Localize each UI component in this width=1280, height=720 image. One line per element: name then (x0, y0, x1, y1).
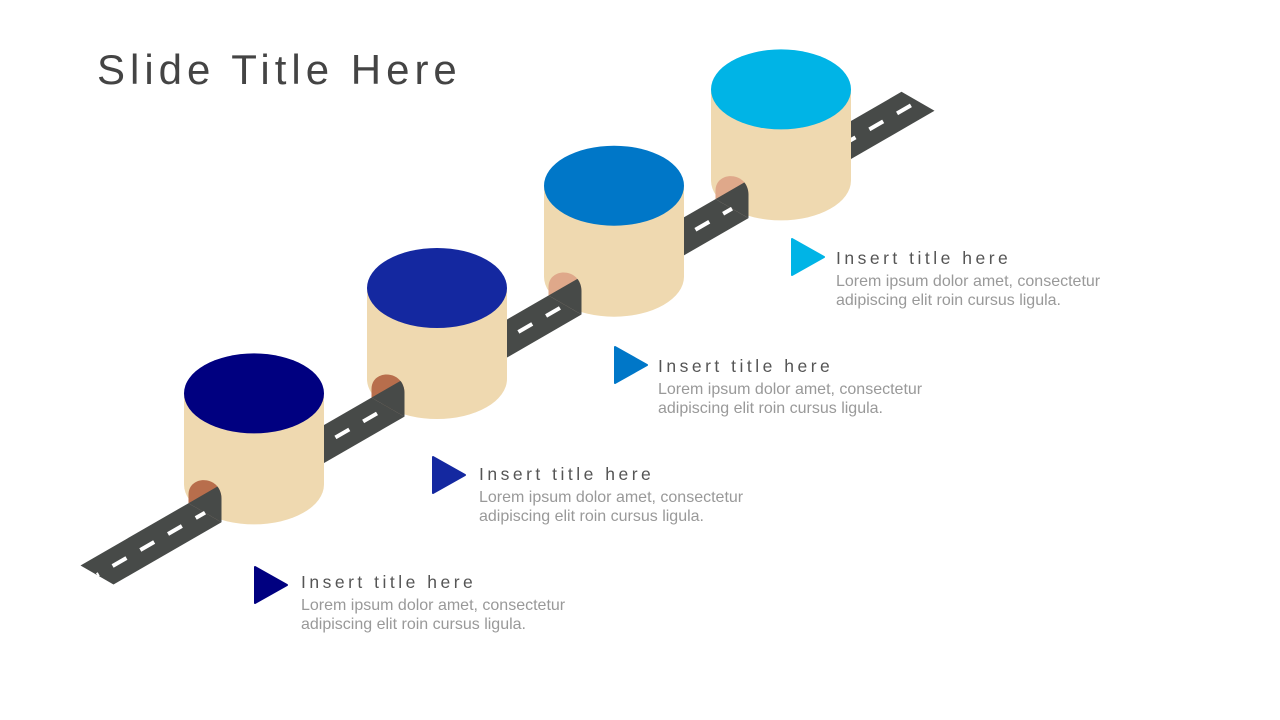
text block 2: Lorem ipsum dolor amet, consectetur (479, 489, 743, 506)
text block 4: Insert title here (836, 248, 1011, 268)
text block 4 (836, 248, 1100, 309)
text block 3 (658, 356, 922, 417)
text block 4: Lorem ipsum dolor amet, consectetur (836, 273, 1100, 290)
text block 1 (301, 572, 565, 633)
text block 2: adipiscing elit roin cursus ligula. (479, 508, 704, 525)
tunnel 3 and road segment (507, 272, 582, 358)
text block 2: Insert title here (479, 464, 654, 484)
text block 3: Lorem ipsum dolor amet, consectetur (658, 381, 922, 398)
text block 1: Lorem ipsum dolor amet, consectetur (301, 597, 565, 614)
cylinder 1 (184, 353, 324, 524)
text block 1: adipiscing elit roin cursus ligula. (301, 616, 526, 633)
cylinder 2 (367, 248, 507, 419)
cylinder 4 (711, 49, 851, 220)
marker triangles (255, 239, 824, 603)
text block 3: adipiscing elit roin cursus ligula. (658, 400, 883, 417)
text block 1: Insert title here (301, 572, 476, 592)
road and cylinders illustration (80, 49, 934, 604)
tunnel 1 and road start (80, 480, 222, 584)
title: Slide Title Here (97, 46, 462, 93)
road tail (764, 92, 934, 190)
text block 3: Insert title here (658, 356, 833, 376)
tunnel 4 and road segment (684, 176, 748, 256)
text block 2 (479, 464, 743, 525)
text block 4: adipiscing elit roin cursus ligula. (836, 292, 1061, 309)
cylinder 3 (544, 146, 684, 317)
tunnel 2 and road segment (324, 374, 404, 463)
